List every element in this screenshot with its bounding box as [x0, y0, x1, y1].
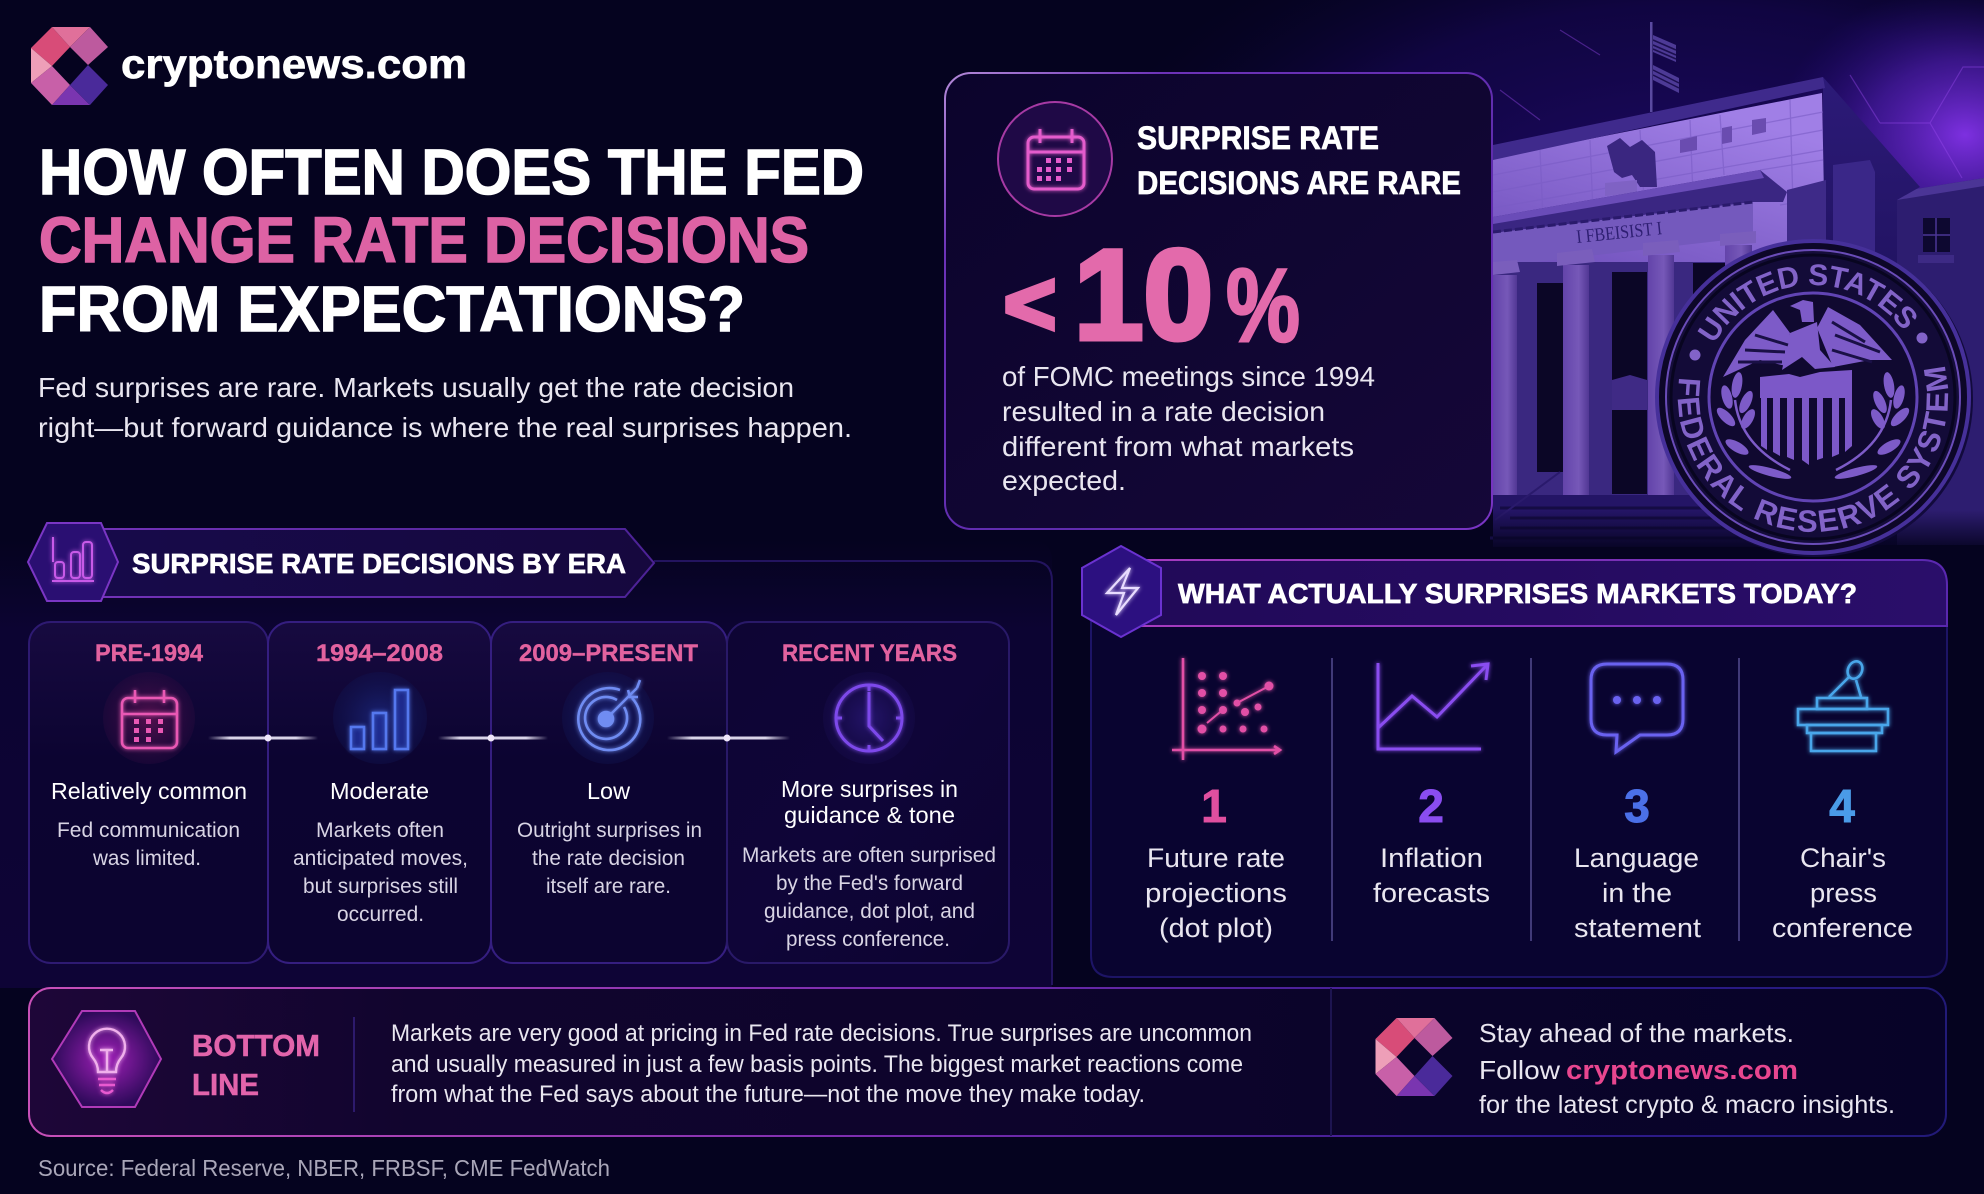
panel: bottom line: [29, 988, 1946, 1136]
big number: <: [1004, 254, 1056, 353]
panel: surprise rate decisions by era: [0, 523, 1052, 988]
laurel right: [1834, 371, 1912, 482]
panel heading: SURPRISE RATE: [1137, 120, 1379, 156]
card: 1994-2008: anticipated moves,: [293, 847, 468, 870]
item 4: chair's press conference: Chair's: [1800, 843, 1886, 873]
item 2: inflation forecasts: forecasts: [1373, 878, 1490, 908]
card: pre-1994: Relatively common: [51, 778, 247, 804]
icon: clock: [823, 672, 915, 764]
card: 1994-2008: Moderate: [330, 778, 429, 804]
card: 1994-2008: occurred.: [337, 903, 424, 926]
card: 1994-2008: [268, 622, 491, 963]
bottom line label: [192, 1028, 320, 1102]
title: CHANGE RATE DECISIONS: [39, 204, 809, 276]
section header tab: [28, 523, 654, 601]
card: recent years: press conference.: [786, 928, 950, 951]
call to action: for the latest crypto & macro insights.: [1479, 1091, 1895, 1119]
main facade: [1493, 77, 1826, 300]
section header: [1082, 546, 1947, 637]
laurel left: [1714, 371, 1792, 482]
item 2: inflation forecasts: [1373, 663, 1490, 908]
timeline connectors: [208, 734, 790, 742]
steps: [1490, 472, 1830, 547]
item 1: future rate projections: projections: [1145, 878, 1287, 908]
logo mark small: [1376, 1018, 1452, 1096]
big number: %: [1226, 248, 1300, 364]
panel body: [1002, 361, 1375, 496]
card: 1994-2008: but surprises still: [303, 875, 458, 898]
item 4: chair's press conference: [1772, 659, 1913, 943]
call to action: cryptonews.com: [1566, 1055, 1798, 1085]
subtitle: [38, 372, 852, 443]
icon: target: [562, 672, 654, 764]
item 4: chair's press conference: 4: [1829, 780, 1855, 832]
title: [39, 136, 864, 345]
section header: WHAT ACTUALLY SURPRISES MARKETS TODAY?: [1178, 578, 1857, 609]
item 1: future rate projections: Future rate: [1147, 843, 1285, 873]
icon: speech bubble: [1591, 664, 1683, 752]
columns: [1493, 231, 1783, 502]
card: pre-1994: was limited.: [92, 847, 201, 870]
icon: calendar: [998, 102, 1112, 216]
column dividers: [1332, 658, 1739, 941]
card: recent years: guidance, dot plot, and: [764, 900, 975, 923]
panel body: of FOMC meetings since 1994: [1002, 361, 1375, 392]
card: recent years: Markets are often surprised: [742, 844, 996, 867]
panel heading: DECISIONS ARE RARE: [1137, 165, 1461, 201]
bottom line text: Markets are very good at pricing in Fed rate decisions. True surprises are uncommon: [391, 1020, 1252, 1047]
card: 2009-present: 2009–PRESENT: [519, 640, 698, 667]
panel heading: [1137, 120, 1461, 201]
item 3: language in the statement: in the: [1602, 878, 1672, 908]
panel body: expected.: [1002, 465, 1126, 496]
card: 1994-2008: Markets often: [316, 819, 444, 842]
bottom line text: and usually measured in just a few basis points. The biggest market reactions come: [391, 1051, 1243, 1078]
card: pre-1994: PRE-1994: [95, 640, 204, 667]
item 1: future rate projections: (dot plot): [1159, 913, 1273, 943]
logo wordmark: cryptonews.com: [121, 41, 467, 87]
source note: Source: Federal Reserve, NBER, FRBSF, CME FedWatch: [38, 1155, 610, 1181]
panel body: different from what markets: [1002, 431, 1354, 462]
logo: cryptonews mark: [31, 27, 108, 105]
panel body: resulted in a rate decision: [1002, 396, 1325, 427]
right wing of the building: [1820, 77, 1984, 545]
card: 2009-present: Outright surprises in: [517, 819, 702, 842]
card: recent years: RECENT YEARS: [782, 640, 957, 667]
card: 2009-present: [491, 622, 727, 963]
card: recent years: by the Fed's forward: [776, 872, 963, 895]
cornice: [1493, 170, 1787, 267]
item 1: future rate projections: [1145, 658, 1287, 943]
item 3: language in the statement: Language: [1574, 843, 1699, 873]
item 3: language in the statement: 3: [1624, 780, 1650, 832]
card: recent years: [727, 622, 1009, 963]
icon: lightning badge: [1082, 546, 1161, 637]
icon: light bulb badge: [52, 1011, 161, 1107]
title: FROM EXPECTATIONS?: [39, 273, 745, 345]
item 4: chair's press conference: press: [1810, 878, 1877, 908]
title: HOW OFTEN DOES THE FED: [39, 136, 864, 208]
seal stars: [1690, 332, 1928, 360]
card: 2009-present: Low: [587, 778, 630, 804]
icon: dot plot: [1172, 658, 1280, 760]
Federal Reserve seal: [1655, 239, 1973, 557]
bottom line text: from what the Fed says about the future—not the move they make today.: [391, 1081, 1145, 1108]
statue: [1605, 138, 1657, 196]
item 4: chair's press conference: conference: [1772, 913, 1913, 943]
card: pre-1994: [29, 622, 268, 963]
seal lettering top: UNITED STATES: [1698, 264, 1916, 340]
icon: bar chart badge: [28, 523, 118, 601]
inscription: I FBEISIST I: [1575, 218, 1663, 248]
item 3: language in the statement: statement: [1574, 913, 1702, 943]
icon: rising bars: [333, 672, 427, 764]
card: 2009-present: the rate decision: [532, 847, 685, 870]
bottom line label: LINE: [192, 1067, 259, 1102]
card: pre-1994: Fed communication: [57, 819, 240, 842]
eagle: [1723, 300, 1892, 377]
item 2: inflation forecasts: Inflation: [1380, 843, 1483, 873]
seal lettering bottom: FEDERAL RESERVE SYSTEM: [1678, 366, 1948, 532]
big number: [1004, 224, 1300, 367]
call to action: Follow: [1479, 1055, 1560, 1085]
big number: 10: [1074, 224, 1213, 367]
card: 1994-2008: 1994–2008: [316, 640, 443, 667]
subtitle: right—but forward guidance is where the real surprises happen.: [38, 412, 852, 443]
item 3: language in the statement: [1574, 664, 1702, 943]
sky glow: [1080, 0, 1984, 550]
hero image: Federal Reserve building and seal: [1240, 0, 1984, 557]
call to action: [1479, 1018, 1895, 1119]
card: recent years: More surprises in: [781, 776, 958, 802]
bottom line label: BOTTOM: [192, 1028, 320, 1063]
icon: calendar: [103, 672, 195, 764]
section header tab: SURPRISE RATE DECISIONS BY ERA: [132, 548, 626, 579]
card: 2009-present: itself are rare.: [546, 875, 671, 898]
shield: [1760, 370, 1852, 465]
item 1: future rate projections: 1: [1201, 780, 1227, 832]
call to action: Stay ahead of the markets.: [1479, 1018, 1794, 1048]
item 2: inflation forecasts: 2: [1418, 780, 1444, 832]
icon: line chart: [1378, 663, 1488, 749]
subtitle: Fed surprises are rare. Markets usually get the rate decision: [38, 372, 794, 403]
bottom line text: [391, 1020, 1252, 1108]
hero fade: [1493, 510, 1984, 552]
panel: surprise rate decisions are rare: [945, 73, 1492, 529]
card: recent years: guidance & tone: [784, 802, 955, 828]
icon: podium: [1798, 659, 1888, 751]
panel: what actually surprises markets today: [1082, 546, 1947, 977]
flagpole and flags: [1650, 22, 1679, 112]
